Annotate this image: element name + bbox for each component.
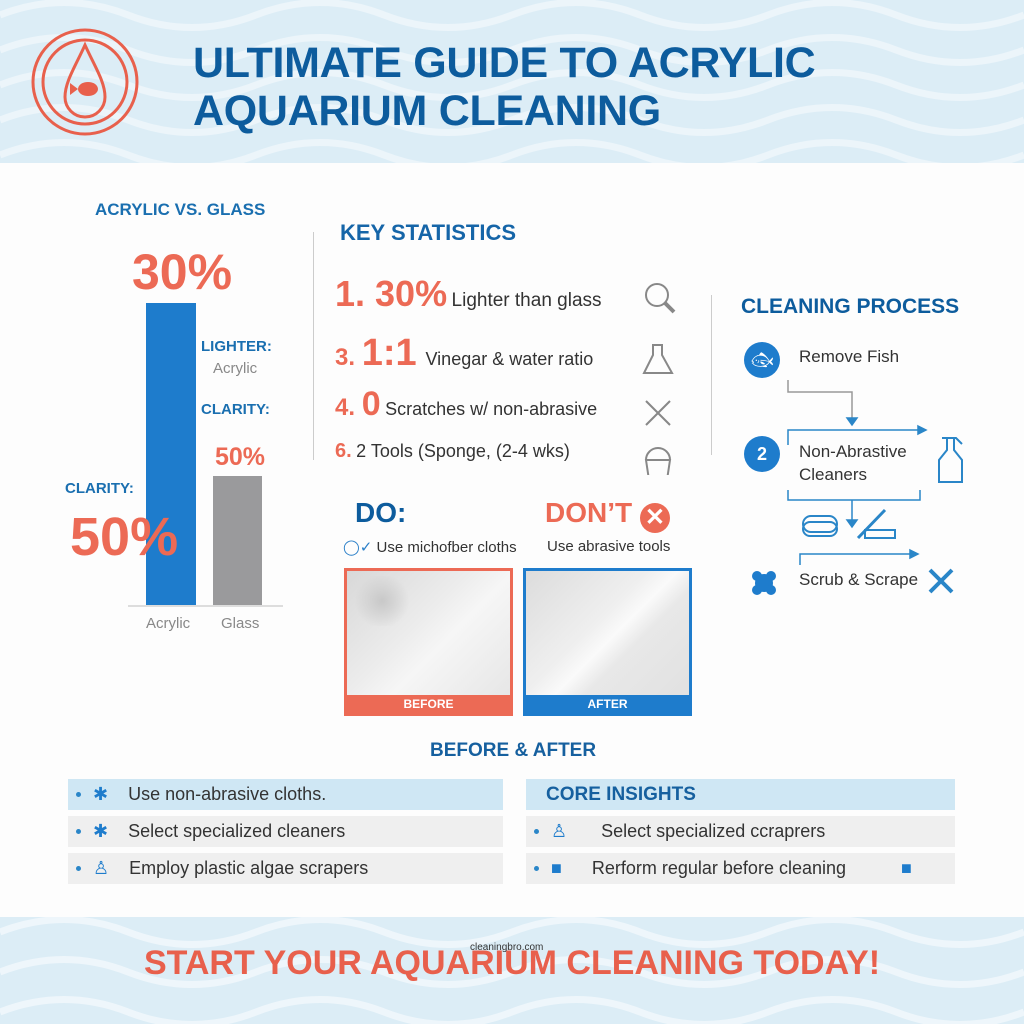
- panel: cleaning process: [741, 295, 963, 595]
- panel: acrylic vs glass chart: 50%: [215, 443, 265, 471]
- panel: cleaning process: Remove Fish: [799, 347, 899, 366]
- list: left tips: Select specialized cleaners: [128, 821, 345, 841]
- header band: [0, 0, 1024, 163]
- stat 2: 3. 1:1 Vinegar & water ratio: [335, 332, 593, 374]
- list: left tips: ✱: [93, 821, 108, 841]
- after image: AFTER: [588, 697, 628, 711]
- panel: acrylic vs glass chart: Acrylic: [146, 615, 190, 632]
- stat 4: 6. 2 Tools (Sponge, (2-4 wks): [335, 440, 570, 462]
- panel: acrylic vs glass chart: 50%: [70, 507, 178, 567]
- list: left tips: [68, 779, 503, 884]
- panel: core insights: ■: [551, 858, 562, 878]
- step 2: [744, 436, 780, 472]
- list: left tips: ♙: [93, 858, 109, 878]
- panel: acrylic vs glass chart: [65, 200, 283, 632]
- step 1: 🐟︎: [751, 350, 773, 370]
- don't text: Use abrasive tools: [547, 538, 670, 555]
- bar acrylic: [146, 303, 196, 605]
- do text: ◯✓ Use michofber cloths: [343, 539, 517, 556]
- heading: KEY STATISTICS: [340, 220, 516, 245]
- title: [193, 39, 815, 135]
- DON'T heading: DON’T: [545, 497, 632, 528]
- panel: do / don't: [343, 497, 692, 716]
- panel: core insights: Select specialized ccraprers: [601, 821, 825, 841]
- arrows and icons: [752, 380, 963, 595]
- panel: acrylic vs glass chart: CLARITY:: [201, 401, 270, 418]
- panel: cleaning process: Non-Abrastive: [799, 442, 907, 461]
- panel: core insights: [526, 779, 955, 884]
- heading: CLEANING PROCESS: [741, 295, 959, 318]
- panel: cleaning process: Cleaners: [799, 465, 867, 484]
- panel: acrylic vs glass chart: Acrylic: [213, 360, 257, 377]
- DON'T heading: ✕: [645, 504, 665, 531]
- list: left tips: Employ plastic algae scrapers: [129, 858, 368, 878]
- DON'T heading: [545, 497, 670, 533]
- icons: [642, 283, 676, 475]
- stat 1: 1. 30% Lighter than glass: [335, 273, 602, 314]
- list: left tips: ✱: [93, 784, 108, 804]
- step 1: [744, 342, 780, 378]
- chart heading: ACRYLIC VS. GLASS: [95, 200, 265, 219]
- heading: before & after: BEFORE & AFTER: [430, 740, 596, 761]
- panel: cleaning process: Scrub & Scrape: [799, 570, 918, 589]
- panel: core insights: CORE INSIGHTS: [546, 784, 696, 804]
- icon: logo drop with fish: [32, 28, 138, 136]
- bar glass: [213, 476, 262, 605]
- after image: [523, 568, 692, 716]
- panel: acrylic vs glass chart: CLARITY:: [65, 480, 134, 497]
- stat 3: 4. 0 Scratches w/ non-abrasive: [335, 385, 597, 423]
- panel: core insights: Rerform regular before cleaning: [592, 858, 846, 878]
- bar labels: LIGHTER:: [201, 338, 272, 355]
- title: AQUARIUM CLEANING: [193, 87, 661, 135]
- panel: acrylic vs glass chart: Glass: [221, 615, 259, 632]
- before image: [344, 568, 513, 716]
- panel: core insights: ♙: [551, 821, 567, 841]
- value 30%: 30%: [132, 244, 232, 300]
- footer band: cleaningbro.com: [470, 942, 543, 953]
- list: left tips: Use non-abrasive cloths.: [128, 784, 326, 804]
- panel: key statistics: [335, 220, 676, 475]
- footer band: [0, 917, 1024, 1024]
- DO heading: DO:: [355, 497, 406, 528]
- title: ULTIMATE GUIDE TO ACRYLIC: [193, 39, 815, 87]
- step 2: 2: [757, 444, 767, 464]
- call to action: START YOUR AQUARIUM CLEANING TODAY!: [144, 944, 880, 982]
- panel: core insights: ■: [901, 858, 912, 878]
- before image: BEFORE: [403, 697, 454, 711]
